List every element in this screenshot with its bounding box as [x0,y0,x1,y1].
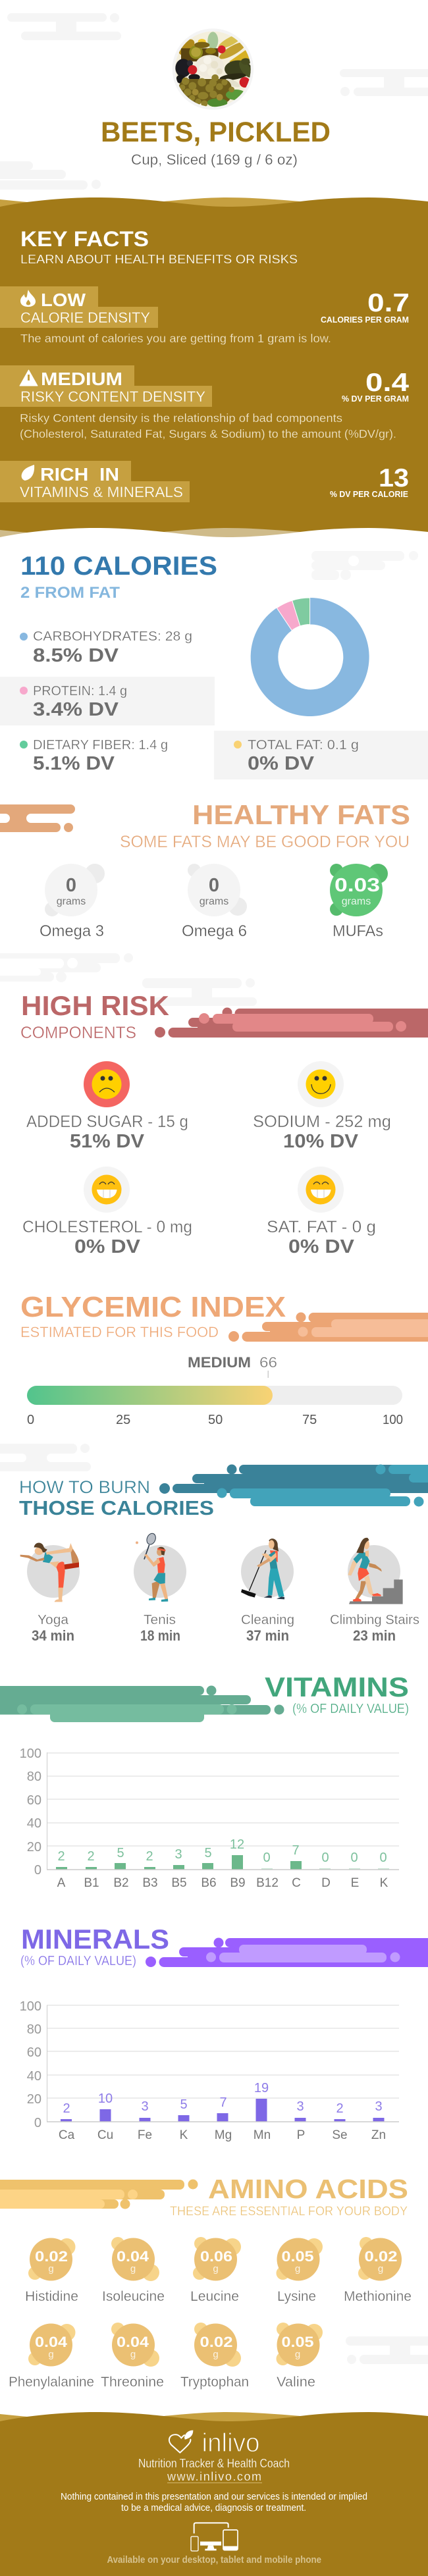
icon: leaf [22,465,34,481]
disclaimer: Nothing contained in this presentation and our services is intended or implied [61,2492,367,2502]
bar chart: vitamins: B6 [201,1876,217,1890]
legend: carbohydrates [20,629,192,666]
item: histidine [25,2238,78,2304]
bar chart: minerals: 7 [219,2095,227,2110]
bar chart: minerals: 3 [141,2099,149,2114]
item: phenylalanine [9,2324,94,2390]
item: cholesterol [22,1167,192,1257]
bar chart: vitamins: 5 [117,1846,124,1860]
legend: protein: PROTEIN: 1.4 g [33,684,127,698]
activity: yoga [20,1543,80,1602]
item: lysine [277,2238,323,2304]
fact: risky content density: Risky Content density is the relationship of bad components [20,411,342,425]
bar chart: vitamins: 7 [292,1843,300,1858]
item: sodium: 10% DV [283,1131,359,1152]
bar chart: minerals: Fe [138,2128,152,2142]
fact: rich in vitamins and minerals [0,461,409,502]
panel: amino acids [0,2174,412,2390]
item: lysine: 0.05 [282,2248,313,2265]
item: saturated fat [267,1167,376,1257]
item: mufas: MUFAs [333,922,383,940]
bar chart: vitamins: 0 [350,1851,358,1865]
bar chart: vitamins: 2 [87,1849,95,1864]
gauge bar: 25 [116,1413,130,1427]
bar chart: minerals: 3 [296,2099,304,2114]
item: mufas [330,864,388,940]
bar chart: minerals: 5 [180,2097,188,2112]
item: tryptophan: g [213,2349,219,2360]
heading: how to burn: HOW TO BURN [19,1477,150,1497]
item: phenylalanine: g [48,2349,54,2360]
decoration: high risk bars [155,1007,428,1038]
legend: total fat: 0% DV [248,753,315,774]
item: omega 6: grams [200,896,228,907]
decoration: glycemic bars [228,1313,428,1342]
panel: footer [0,2412,428,2576]
legend: carbohydrates: CARBOHYDRATES: 28 g [33,629,192,644]
heading: key facts: KEY FACTS [20,227,149,251]
bar chart: vitamins: B1 [84,1876,99,1890]
background cloud: burn calories [0,1444,91,1471]
bar chart: vitamins: D [321,1876,331,1890]
decoration: vitamins bars [0,1685,284,1722]
item: threonine: Threonine [101,2375,164,2390]
bar chart: vitamins: 100 [20,1747,41,1761]
bar chart: vitamins: B12 [256,1876,279,1890]
glycemic value: MEDIUM [188,1354,251,1371]
fact: risky content density: RISKY CONTENT DENSITY [20,388,205,405]
panel: high risk components [20,990,428,1257]
item: isoleucine: g [130,2263,136,2274]
bar chart: minerals: 60 [27,2045,41,2060]
bar chart: vitamins: 12 [230,1837,244,1852]
bar chart: minerals: Mg [215,2128,232,2142]
bar chart: vitamins: A [57,1876,66,1890]
bar chart: vitamins: 5 [204,1846,212,1860]
glycemic value [188,1354,277,1378]
heading: vitamins: VITAMINS [265,1671,409,1702]
heading: minerals: MINERALS [21,1924,169,1955]
bar chart: vitamins: B3 [142,1876,158,1890]
panel: key facts [0,197,428,548]
background cloud: amino [346,2336,428,2364]
item: valine: 0.05 [282,2334,313,2350]
heading: high risk: HIGH RISK [21,990,169,1021]
fact: risky content density: (Cholesterol, Saturated Fat, Sugars & Sodium) to the amount (%DV/gr). [20,427,396,440]
item: added sugar: ADDED SUGAR - 15 g [26,1113,188,1131]
item: lysine: g [295,2263,300,2274]
fact: calorie density: LOW [41,290,86,310]
bar chart: minerals: 10 [98,2091,113,2106]
subheading: healthy fats: SOME FATS MAY BE GOOD FOR YOU [120,833,410,851]
decoration: healthy fats bars [0,804,75,832]
gauge bar: 75 [302,1413,317,1427]
bar chart: vitamins: B5 [171,1876,187,1890]
subheading: minerals: (% OF DAILY VALUE) [20,1954,136,1968]
item: tryptophan: Tryptophan [180,2375,249,2390]
item: leucine: 0.06 [200,2248,232,2265]
donut chart [251,598,369,716]
disclaimer [61,2492,367,2513]
item: mufas: 0.03 [334,875,380,896]
panel: healthy fats [0,799,410,940]
fact: rich in vitamins and minerals: VITAMINS & MINERALS [20,484,183,500]
bar chart: minerals: 0 [34,2116,41,2130]
item: omega 3: Omega 3 [40,922,104,940]
heading: healthy fats: HEALTHY FATS [192,799,410,830]
bar chart: minerals: 2 [336,2101,344,2116]
legend: dietary fiber: 5.1% DV [33,753,115,774]
item: cholesterol: CHOLESTEROL - 0 mg [22,1218,192,1236]
item: cholesterol: 0% DV [74,1236,141,1257]
activity labels: Cleaning [241,1613,294,1627]
panel: glycemic index [20,1291,428,1427]
item: omega 3: 0 [66,875,76,896]
disclaimer: to be a medical advice, diagnosis or treatment. [121,2503,306,2513]
glycemic value: 66 [259,1354,277,1371]
background clouds: high risk [0,953,257,1006]
item: threonine [101,2323,164,2390]
heading: glycemic index: GLYCEMIC INDEX [20,1291,286,1323]
bar chart: vitamins: K [380,1876,388,1890]
food photo [173,28,255,110]
panel: how to burn those calories [19,1464,428,1644]
activity: tennis [134,1532,186,1602]
website link: www.inlivo.com [167,2470,261,2483]
gauge bar [27,1386,403,1427]
panel: vitamins [0,1671,409,1890]
item: methionine [344,2237,412,2304]
item: tryptophan: 0.02 [200,2334,233,2350]
item: saturated fat: 0% DV [288,1236,355,1257]
legend: total fat [214,731,428,779]
item: isoleucine: 0.04 [117,2248,149,2265]
bar chart: vitamins: 60 [27,1793,41,1808]
item: valine: Valine [277,2375,315,2390]
bar chart: minerals: 40 [27,2069,41,2084]
bar chart: vitamins: C [292,1876,301,1890]
item: methionine: 0.02 [365,2248,398,2265]
legend: carbohydrates: 8.5% DV [33,645,119,666]
bar chart: minerals: Cu [97,2128,113,2142]
item: isoleucine: Isoleucine [102,2289,165,2304]
fact: rich in vitamins and minerals: 13 [379,464,409,492]
item: added sugar: 51% DV [70,1131,145,1152]
item: lysine: Lysine [277,2289,316,2304]
icon: flame [20,290,36,307]
background clouds: header [0,13,428,190]
serving subtitle: Cup, Sliced (169 g / 6 oz) [131,151,298,168]
subheading: from fat: 2 FROM FAT [20,584,120,602]
item: methionine: Methionine [344,2289,412,2304]
bar chart: vitamins: 3 [174,1847,182,1862]
activity labels: 18 min [140,1627,180,1644]
item: mufas: grams [342,896,371,907]
bar chart: minerals: 20 [27,2092,41,2107]
bar chart: minerals: 2 [63,2101,70,2116]
gauge bar: 50 [208,1413,223,1427]
logo: inlivo [169,2429,259,2458]
item: threonine: 0.04 [117,2334,149,2350]
bar chart: minerals: Mn [254,2128,271,2142]
fact: risky content density: 0.4 [365,369,409,397]
activity labels: Climbing Stairs [330,1613,419,1627]
activity: cleaning [241,1538,294,1599]
item: sodium: SODIUM - 252 mg [253,1113,391,1131]
title: BEETS, PICKLED [101,117,331,148]
gauge bar: 100 [383,1413,403,1427]
legend: total fat: TOTAL FAT: 0.1 g [248,738,359,752]
icon: warning [20,370,38,386]
fact: rich in vitamins and minerals: % DV PER CALORIE [330,490,408,499]
fact: calorie density [0,286,410,345]
fact: risky content density: % DV PER GRAM [342,394,409,404]
bar chart: vitamins: 80 [27,1770,41,1784]
decoration: burn bars [159,1464,428,1506]
bar chart: minerals: 80 [27,2022,41,2037]
item: omega 6 [182,864,247,940]
subheading: amino acids: THESE ARE ESSENTIAL FOR YOUR BODY [170,2205,408,2219]
fact: risky content density: MEDIUM [41,369,122,389]
fact: calorie density: The amount of calories you are getting from 1 gram is low. [20,332,331,345]
gauge bar: 0 [27,1413,34,1427]
heading: calories: 110 CALORIES [20,552,217,581]
item: methionine: g [378,2263,383,2274]
bar chart: vitamins: B9 [230,1876,246,1890]
activity labels: 34 min [32,1627,74,1644]
subheading: key facts: LEARN ABOUT HEALTH BENEFITS OR RISKS [20,252,298,266]
bar chart: minerals: 19 [254,2081,269,2095]
subheading: vitamins: (% OF DAILY VALUE) [292,1702,409,1716]
item: tryptophan [180,2323,249,2390]
activity labels [32,1613,419,1644]
bar chart: minerals: Se [332,2128,348,2142]
item: saturated fat: SAT. FAT - 0 g [267,1218,376,1236]
item: valine [277,2323,323,2390]
bar chart: vitamins: E [351,1876,359,1890]
heading: amino acids: AMINO ACIDS [208,2174,408,2204]
bar chart: minerals: P [297,2128,305,2142]
logo: inlivo: inlivo [201,2429,259,2458]
item: phenylalanine: 0.04 [35,2334,68,2350]
item: phenylalanine: Phenylalanine [9,2375,94,2390]
item: histidine: Histidine [25,2289,78,2304]
legend: protein: 3.4% DV [33,699,119,720]
bar chart: vitamins: 2 [57,1849,65,1864]
item: omega 6: 0 [209,875,219,896]
item: histidine: g [48,2263,54,2274]
tagline: Nutrition Tracker & Health Coach [138,2457,290,2470]
bar chart: vitamins: 0 [263,1851,271,1865]
bar chart: minerals: Ca [59,2128,75,2142]
decoration: amino bars [0,2179,198,2209]
item: omega 6: Omega 6 [182,922,247,940]
fact: risky content density [0,365,409,440]
item: valine: g [295,2349,300,2360]
bar chart: vitamins: 0 [34,1863,41,1878]
activity labels: Yoga [38,1613,69,1627]
item: leucine: Leucine [190,2289,239,2304]
item: omega 3: grams [57,896,86,907]
activity labels: 37 min [246,1627,289,1644]
bar chart: vitamins: 0 [379,1851,387,1865]
activity labels: Tenis [144,1613,176,1627]
legend: dietary fiber: DIETARY FIBER: 1.4 g [33,738,168,752]
bar chart: minerals: K [180,2128,188,2142]
bar chart: vitamins: B2 [113,1876,129,1890]
item: threonine: g [130,2349,136,2360]
item: omega 3 [40,864,105,940]
bar chart: vitamins: 20 [27,1840,41,1854]
decoration: minerals bars [146,1938,428,1967]
subheading: glycemic index: ESTIMATED FOR THIS FOOD [20,1324,219,1340]
bar chart: minerals [20,1999,399,2142]
panel: minerals [20,1924,428,2142]
bar chart: minerals: Zn [371,2128,386,2142]
fact: rich in vitamins and minerals: RICH IN [40,464,119,485]
legend: protein [0,677,215,725]
bar chart: vitamins [20,1747,399,1890]
availability note: Available on your desktop, tablet and mobile phone [107,2555,321,2565]
item: isoleucine [102,2237,165,2304]
item: sodium [253,1061,391,1152]
fact: calorie density: 0.7 [367,289,410,317]
bar chart: vitamins: 2 [146,1849,153,1864]
fact: calorie density: CALORIE DENSITY [20,309,150,326]
activity labels: 23 min [353,1627,396,1644]
subheading: components: COMPONENTS [20,1024,136,1042]
heading: those calories: THOSE CALORIES [19,1496,214,1519]
bar chart: minerals: 3 [375,2099,383,2114]
icon: devices [191,2523,238,2551]
bar chart: minerals: 100 [20,1999,41,2014]
item: histidine: 0.02 [35,2248,68,2265]
bar chart: vitamins: 40 [27,1816,41,1831]
bar chart: vitamins: 0 [321,1851,329,1865]
activity: climbing stairs [348,1538,403,1604]
item: added sugar [26,1061,188,1152]
panel: calories [0,551,428,779]
fact: calorie density: CALORIES PER GRAM [321,315,409,325]
item: leucine: g [213,2263,219,2274]
item: leucine [190,2237,241,2304]
legend: dietary fiber [20,738,168,774]
